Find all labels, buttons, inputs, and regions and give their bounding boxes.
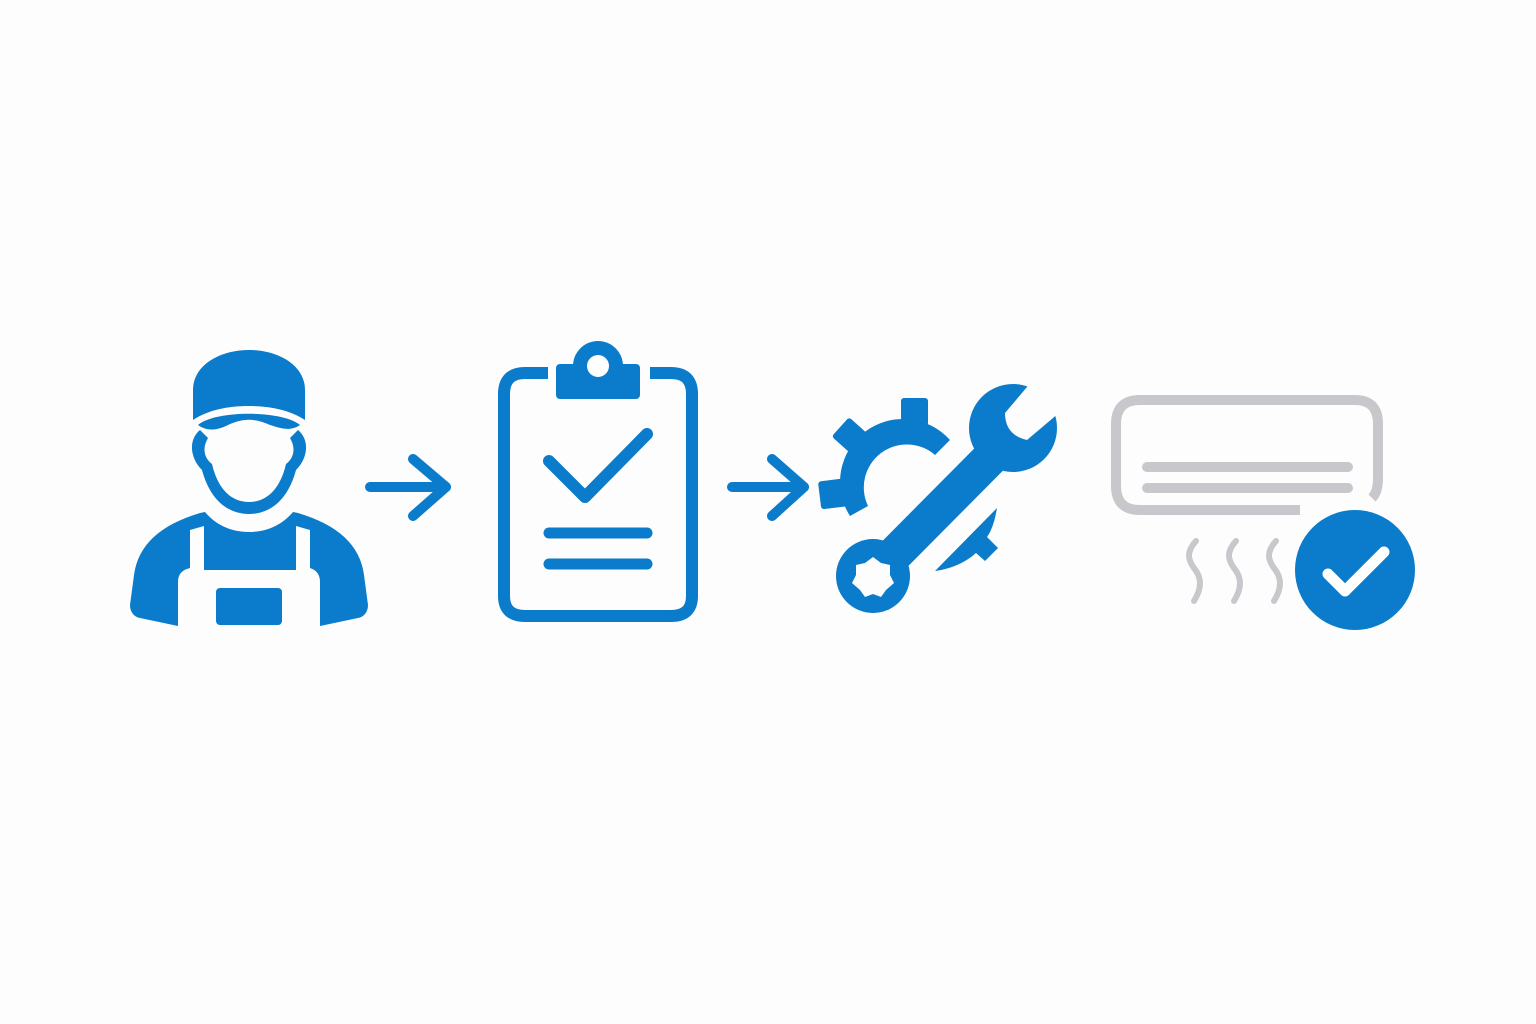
icon: technician <box>130 350 368 626</box>
icon: gear and wrench <box>818 372 1070 613</box>
arrow: step 2 to 3 <box>732 459 804 516</box>
icon: clipboard checklist <box>504 341 692 616</box>
arrow: step 1 to 2 <box>370 459 446 516</box>
icon: air conditioner with check <box>1116 400 1421 636</box>
